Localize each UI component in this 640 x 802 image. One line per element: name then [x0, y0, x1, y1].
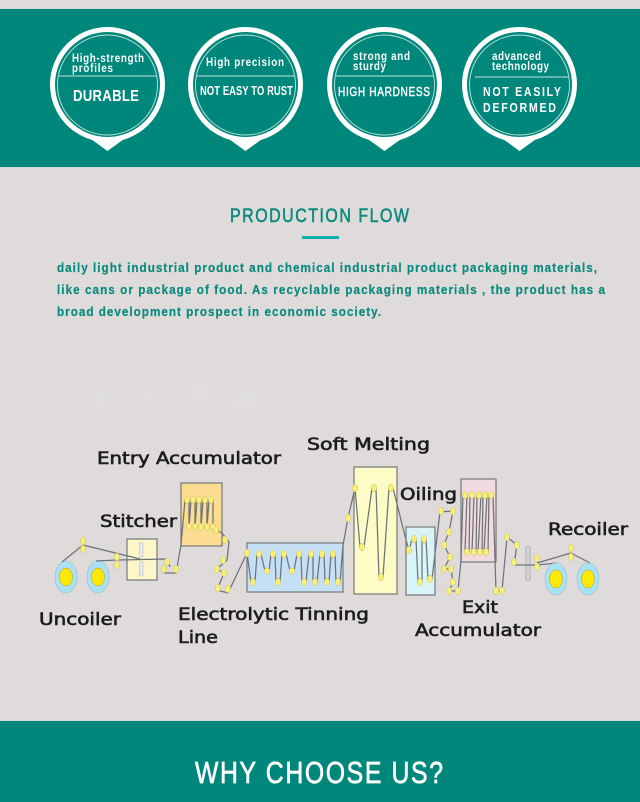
stitcher box [127, 539, 157, 580]
badge: durable [50, 27, 165, 151]
diagram labels: Entry Accumulator [97, 449, 281, 468]
electrolytic tinning box [247, 543, 343, 592]
diagram labels: Line [178, 628, 218, 647]
panel: why choose us banner [0, 721, 640, 802]
heading underline [302, 236, 339, 239]
text block: description [57, 260, 605, 319]
recoiler coils [545, 563, 599, 595]
badge: durable: profiles [72, 62, 113, 75]
text block: description: daily light industrial product and chemical industrial product packaging materials, [57, 260, 597, 275]
text block: description: like cans or package of food. As recyclable packaging materials , the product has a [57, 282, 605, 297]
rollers [80, 484, 574, 595]
diagram labels: Accumulator [415, 621, 541, 640]
uncoiler coils [55, 561, 109, 593]
badge: high hardness [327, 27, 442, 151]
badge: not easy to rust [188, 27, 303, 151]
badge: not easily deformed: NOT EASILY [483, 84, 561, 99]
diagram labels: Soft Melting [307, 435, 430, 454]
diagram labels: Uncoiler [39, 610, 121, 629]
badge: not easily deformed: DEFORMED [483, 100, 556, 115]
chart: production line diagram [39, 435, 628, 647]
panel: why choose us banner: WHY CHOOSE US? [195, 755, 443, 790]
diagram labels: Stitcher [100, 512, 177, 531]
badge: not easily deformed: technology [492, 60, 550, 73]
recoiler shear [526, 547, 530, 580]
badge: durable: DURABLE [73, 88, 139, 105]
diagram labels: Oiling [400, 485, 457, 504]
badge: high hardness: HIGH HARDNESS [338, 85, 430, 99]
diagram labels: Recoiler [548, 520, 628, 539]
faint artefact [92, 385, 256, 408]
badge: high hardness: sturdy [353, 60, 387, 73]
heading: production flow: PRODUCTION FLOW [230, 205, 409, 226]
text block: description: broad development prospect in economic society. [57, 304, 381, 319]
diagram labels: Exit [462, 598, 499, 617]
oiling box [406, 527, 435, 595]
badge: not easy to rust: High precision [206, 56, 284, 69]
panel: feature badges band [0, 9, 640, 167]
badge: not easy to rust: NOT EASY TO RUST [200, 85, 293, 98]
diagram labels: Electrolytic Tinning [178, 605, 369, 624]
soft melting box [354, 467, 397, 594]
exit accumulator box [461, 479, 496, 562]
diagram labels [39, 435, 628, 647]
badge: not easily deformed [462, 27, 577, 151]
entry accumulator box [181, 483, 222, 546]
badge: durable: High-strength [72, 52, 144, 65]
strip path wires [62, 488, 590, 593]
badge: high hardness: strong and [353, 50, 410, 63]
badge: not easily deformed: advanced [492, 50, 541, 63]
